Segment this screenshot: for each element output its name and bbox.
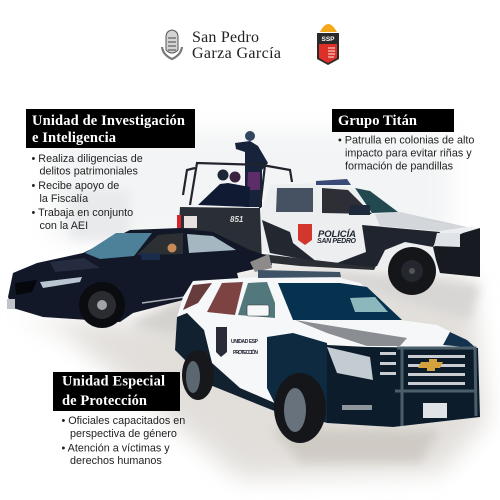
front bumper: [433, 228, 480, 277]
light bar: [258, 270, 341, 278]
taillight: [250, 254, 272, 272]
windows: [183, 282, 402, 320]
suv body: [175, 276, 480, 427]
roll cage: [183, 163, 292, 208]
hood stripe: [405, 216, 458, 225]
panel: Unidad Especial de Protección: [53, 372, 185, 467]
logo wordmark: Garza García: [192, 45, 281, 62]
sedan body: [8, 228, 272, 322]
door lettering: UNIDAD ESP: [231, 339, 259, 345]
hood dark corner: [443, 332, 476, 348]
logo wordmark: [192, 29, 281, 62]
heading box: [26, 109, 195, 148]
bullet list: • Patrulla en colonias de alto: [338, 134, 474, 146]
truck body: [258, 183, 480, 277]
heading box: [53, 372, 180, 411]
bumper guard: [395, 348, 476, 426]
bullet list: • Realiza diligencias de: [32, 153, 143, 165]
heading box: Unidad Especial: [62, 374, 165, 390]
rear wheel: [182, 350, 214, 400]
front end: [327, 345, 480, 427]
hood grey band: [295, 320, 407, 346]
mirror: [247, 305, 269, 316]
heading box: e Inteligencia: [32, 130, 117, 146]
bullet list: [338, 134, 474, 172]
officer standing: [235, 131, 268, 207]
vehicle: investigation sedan: [7, 228, 272, 328]
side and rear windows: [276, 188, 398, 214]
chevrolet emblem: [418, 359, 443, 371]
side windows: [137, 233, 236, 255]
mirror: [140, 253, 160, 260]
panel: Grupo Titán: [332, 109, 474, 172]
unit number: 851: [230, 215, 244, 224]
logo: SSP shield: SSP: [321, 36, 335, 43]
light bar: [316, 179, 351, 185]
rear dark panel: [175, 313, 277, 412]
grille and plate: [7, 280, 37, 309]
hood: [375, 212, 467, 231]
headlight: [327, 347, 373, 380]
bullet list: [32, 153, 143, 232]
bullet list: derechos humanos: [70, 455, 162, 467]
rear lights and plate: [177, 215, 197, 228]
front wheel: [79, 282, 125, 328]
bullet list: [62, 415, 185, 467]
door badge: [298, 224, 312, 245]
door lettering: [231, 339, 259, 356]
bullet list: • Atención a víctimas y: [62, 442, 170, 454]
front fender: [267, 333, 330, 423]
bullet list: formación de pandillas: [345, 160, 454, 172]
heading box: de Protección: [62, 393, 147, 409]
door lettering: POLICÍA: [318, 229, 356, 240]
bullet list: • Recibe apoyo de: [32, 180, 119, 192]
vehicle: Unidad Especial SUV: [175, 270, 480, 443]
panel: Unidad de Investigación e Inteligencia: [26, 109, 195, 232]
hood highlight: [50, 258, 100, 272]
mirror: [349, 205, 370, 215]
bullet list: la Fiscalía: [40, 193, 88, 205]
plate: [423, 403, 447, 418]
door emblem: [216, 327, 227, 357]
door lettering: PROTECCIÓN: [233, 348, 258, 356]
fog light: [342, 405, 372, 410]
logo wordmark: San Pedro: [192, 29, 259, 46]
grille: [380, 352, 465, 385]
officers in truck bed: [198, 170, 250, 207]
bullet list: impacto para evitar riñas y: [345, 148, 472, 160]
background: hazy buildings and ground: [12, 130, 488, 478]
headlight: [434, 233, 460, 247]
bullet list: delitos patrimoniales: [40, 166, 139, 178]
door trim: [142, 297, 185, 303]
logo: SSP shield: [317, 24, 339, 65]
bullet list: • Trabaja en conjunto: [32, 207, 133, 219]
door black swoosh: [337, 225, 440, 267]
heading box: Grupo Titán: [338, 113, 417, 129]
dark rear bed: [178, 207, 262, 262]
door lettering: [317, 229, 357, 245]
bullet list: perspectiva de género: [70, 428, 177, 440]
bullet list: • Oficiales capacitados en: [62, 415, 185, 427]
lower sill: [262, 254, 376, 270]
heading box: [332, 109, 454, 132]
windshield: [85, 233, 152, 259]
headlight: [40, 277, 82, 288]
driver: [168, 244, 176, 252]
logo: San Pedro Garza García: [162, 29, 281, 62]
vehicle: Grupo Titán pickup: [177, 131, 480, 295]
rear door dark panel: [262, 220, 317, 262]
heading box: Unidad de Investigación: [32, 113, 185, 129]
front wheel: [388, 247, 436, 295]
door lettering: SAN PEDRO: [317, 238, 357, 245]
bullet list: con la AEI: [40, 220, 88, 232]
icon: municipal crest: [162, 30, 182, 59]
front wheel: [274, 373, 326, 443]
